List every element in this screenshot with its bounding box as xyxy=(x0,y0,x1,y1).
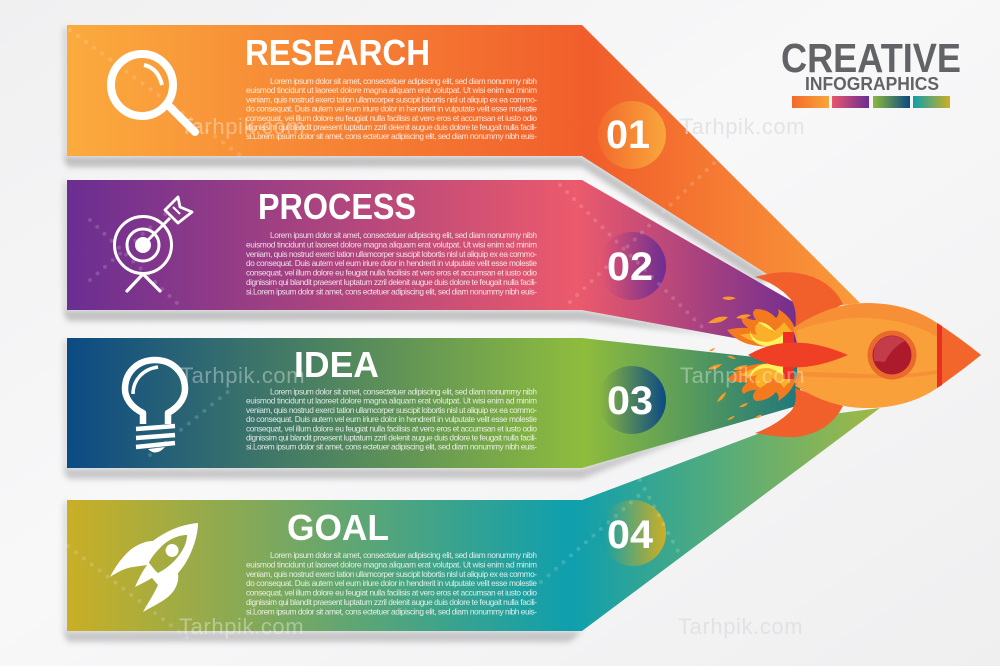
panel shadow xyxy=(64,25,770,284)
body text: veniam, quis nostrud exerci tation ullamcorper suscipit lobortis nisl ut aliquip ex ea commo- xyxy=(246,94,537,104)
icon: light bulb xyxy=(125,360,185,453)
watermark dotted lines xyxy=(60,30,715,640)
rocket nozzles xyxy=(783,332,794,379)
body text: si.Lorem ipsum dolor sit amet, cons ectetuer adipiscing elit, sed diam nonummy nibh euis- xyxy=(246,606,537,616)
rocket body highlight xyxy=(797,318,937,374)
panel: research xyxy=(64,25,860,310)
body text: Lorem ipsum dolor sit amet, consectetuer adipiscing elit, sed diam nonummy nibh xyxy=(270,76,537,86)
body text: Lorem ipsum dolor sit amet, consectetuer adipiscing elit, sed diam nonummy nibh xyxy=(270,386,537,396)
panel shadow xyxy=(64,338,720,479)
panel: goal xyxy=(64,408,880,642)
rocket window xyxy=(868,330,916,380)
body text: si.Lorem ipsum dolor sit amet, cons ectetuer adipiscing elit, sed diam nonummy nibh euis- xyxy=(246,286,537,296)
body text: consequat, vel illum dolore eu feugiat nulla facilisis at vero eros et accumsan et iusto odio xyxy=(246,268,537,278)
body text xyxy=(246,386,537,452)
rocket illustration xyxy=(708,272,981,437)
arrow band xyxy=(67,408,880,631)
logo: creative infographics xyxy=(781,35,961,108)
heading: process: PROCESS xyxy=(258,186,416,227)
body text: veniam, quis nostrud exerci tation ullamcorper suscipit lobortis nisl ut aliquip ex ea commo- xyxy=(246,569,537,579)
arrow band xyxy=(67,180,800,350)
body text: do consequat. Duis autem vel eum iriure dolor in hendrerit in vulputate velit esse molestie xyxy=(246,104,537,114)
body text: euismod tincidunt ut laoreet dolore magna aliquam erat volutpat. Ut wisi enim ad minim xyxy=(246,396,537,406)
icon: target with arrow xyxy=(114,197,192,291)
arrow band xyxy=(67,338,800,468)
body text: Lorem ipsum dolor sit amet, consectetuer adipiscing elit, sed diam nonummy nibh xyxy=(270,550,537,560)
rocket body xyxy=(793,303,981,408)
body text xyxy=(246,230,537,296)
logo colour bars xyxy=(792,96,950,108)
body text: Lorem ipsum dolor sit amet, consectetuer adipiscing elit, sed diam nonummy nibh xyxy=(270,230,537,240)
icon: rocket xyxy=(110,523,198,612)
body text: do consequat. Duis autem vel eum iriure dolor in hendrerit in vulputate velit esse molestie xyxy=(246,578,537,588)
heading: goal: GOAL xyxy=(287,507,389,548)
watermark text: Tarhpik.com xyxy=(680,363,805,388)
lower flame xyxy=(727,363,795,401)
number badge 02: 02 xyxy=(607,245,653,289)
heading: research: RESEARCH xyxy=(245,32,430,73)
panel: process xyxy=(64,180,800,350)
body text xyxy=(246,550,537,616)
watermark text: Tarhpik.com xyxy=(678,614,803,639)
flame sparks xyxy=(708,296,762,420)
rocket lower fin xyxy=(755,388,843,437)
rocket centre fin xyxy=(748,342,848,368)
body text: do consequat. Duis autem vel eum iriure dolor in hendrerit in vulputate velit esse molestie xyxy=(246,414,537,424)
number badge 01 xyxy=(598,101,666,169)
number badge 03: 03 xyxy=(607,379,653,423)
rocket nose xyxy=(937,323,981,388)
number badge 04 xyxy=(600,500,666,566)
watermark text: Tarhpik.com xyxy=(180,363,305,388)
rocket nose stripe xyxy=(937,323,942,388)
upper flame xyxy=(727,309,795,347)
body text: dignissim qui blandit praesent luptatum zzril delenit augue duis dolore te feugait nulla facili- xyxy=(246,122,537,132)
body text: consequat, vel illum dolore eu feugiat nulla facilisis at vero eros et accumsan et iusto odio xyxy=(246,588,537,598)
body text: euismod tincidunt ut laoreet dolore magna aliquam erat volutpat. Ut wisi enim ad minim xyxy=(246,559,537,569)
body text: dignissim qui blandit praesent luptatum zzril delenit augue duis dolore te feugait nulla facili- xyxy=(246,277,537,287)
panel shadow xyxy=(64,180,720,335)
body text: euismod tincidunt ut laoreet dolore magna aliquam erat volutpat. Ut wisi enim ad minim xyxy=(246,85,537,95)
body text: consequat, vel illum dolore eu feugiat nulla facilisis at vero eros et accumsan et iusto odio xyxy=(246,113,537,123)
watermark text xyxy=(179,114,805,639)
body text: dignissim qui blandit praesent luptatum zzril delenit augue duis dolore te feugait nulla facili- xyxy=(246,597,537,607)
number badge 01: 01 xyxy=(606,113,650,157)
body text: consequat, vel illum dolore eu feugiat nulla facilisis at vero eros et accumsan et iusto odio xyxy=(246,423,537,433)
rocket body lower band xyxy=(797,374,937,408)
body text xyxy=(246,76,537,141)
body text: dignissim qui blandit praesent luptatum zzril delenit augue duis dolore te feugait nulla facili- xyxy=(246,432,537,442)
panel: idea xyxy=(64,338,800,479)
panel shadow xyxy=(64,500,582,642)
rocket upper fin xyxy=(755,272,843,330)
watermark text: Tarhpik.com xyxy=(680,114,805,139)
watermark text: Tarhpik.com xyxy=(179,614,304,639)
number badge 02 xyxy=(598,232,666,300)
logo word: creative: CREATIVE xyxy=(781,35,961,81)
body text: si.Lorem ipsum dolor sit amet, cons ectetuer adipiscing elit, sed diam nonummy nibh euis- xyxy=(246,131,537,141)
number badge 04: 04 xyxy=(607,513,654,557)
icon: magnifying glass xyxy=(111,54,195,132)
body text: euismod tincidunt ut laoreet dolore magna aliquam erat volutpat. Ut wisi enim ad minim xyxy=(246,239,537,249)
heading: idea: IDEA xyxy=(294,344,379,385)
body text: veniam, quis nostrud exerci tation ullamcorper suscipit lobortis nisl ut aliquip ex ea commo- xyxy=(246,249,537,259)
body text: si.Lorem ipsum dolor sit amet, cons ectetuer adipiscing elit, sed diam nonummy nibh euis- xyxy=(246,442,537,452)
body text: do consequat. Duis autem vel eum iriure dolor in hendrerit in vulputate velit esse molestie xyxy=(246,258,537,268)
arrow band xyxy=(67,25,860,310)
watermark text: Tarhpik.com xyxy=(180,114,305,139)
logo word: infographics: INFOGRAPHICS xyxy=(805,74,939,94)
number badge 03 xyxy=(598,366,666,434)
body text: veniam, quis nostrud exerci tation ullamcorper suscipit lobortis nisl ut aliquip ex ea commo- xyxy=(246,405,537,415)
